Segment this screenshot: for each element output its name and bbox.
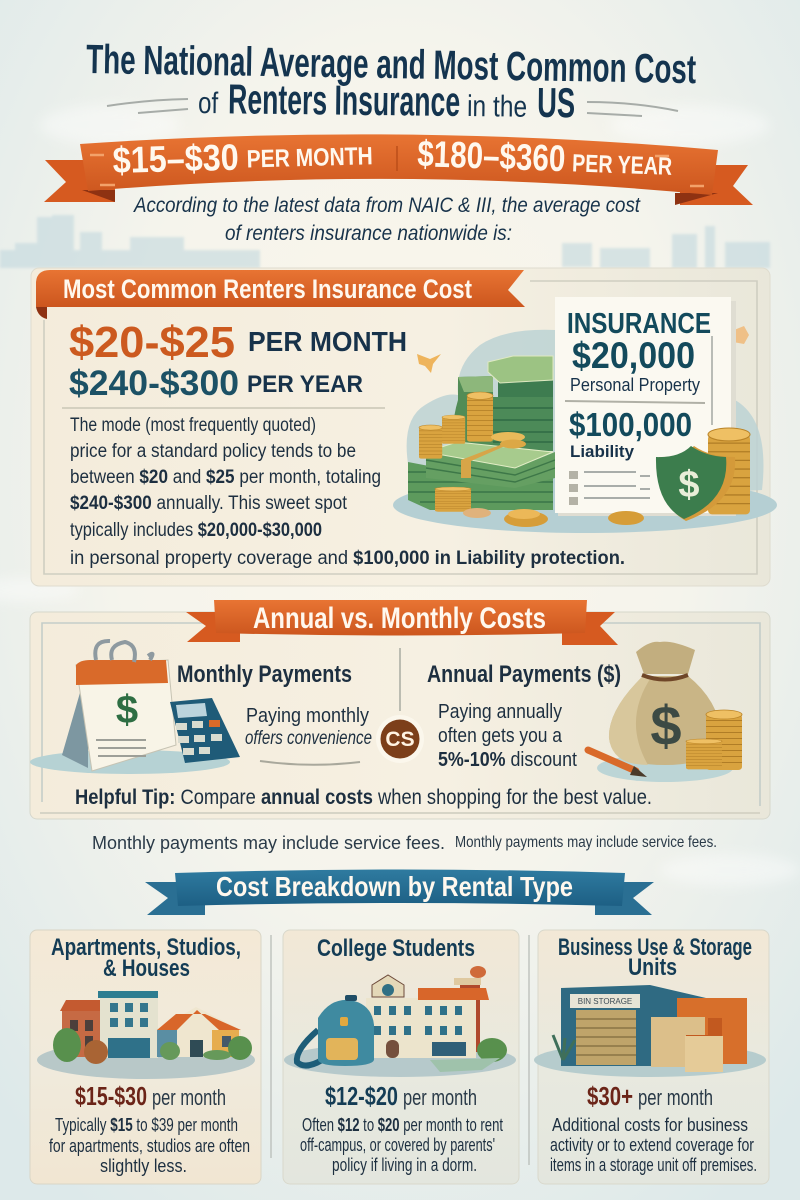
price per month: $15–$30 [112,137,239,181]
footnote: Monthly payments may include service fees. [455,834,717,851]
yearly price: $240-$300 [69,364,239,403]
intro text [132,194,641,245]
card price: $12-$20 [325,1081,398,1111]
body text: between $20 and $25 per month, totaling [70,467,381,488]
shield: $ [678,464,700,506]
yearly price [69,364,363,403]
title [86,36,697,126]
card price: per month [152,1085,226,1110]
card title: Apartments, Studios, [51,934,241,961]
card description: for apartments, studios are often [49,1136,250,1156]
price per year [417,133,673,183]
ribbon heading [186,600,618,645]
card: apartments, studios and houses [30,930,261,1184]
body text: typically includes $20,000-$30,000 [70,520,322,541]
icon: calendar and calculator: $ [116,688,138,732]
yearly price: PER YEAR [247,371,363,398]
title: US [537,79,575,126]
section heading: cost breakdown [145,870,654,915]
monthly price: $20-$25 [69,318,235,367]
price per year: $180–$360 [417,133,566,179]
card price [325,1081,477,1111]
body text: in personal property coverage and $100,000 in Liability protection. [70,548,625,569]
annual payments text [427,661,621,771]
illustration: storage unit [534,985,766,1077]
body text [70,415,625,569]
title: Renters Insurance [228,75,460,125]
policy document: INSURANCE [567,308,711,340]
body text: $240-$300 annually. This sweet spot [70,493,348,514]
card price: per month [638,1085,713,1110]
shield [656,446,735,521]
card price: per month [403,1085,477,1110]
illustration: backpack and campus [284,966,516,1077]
monthly payments text [177,661,372,765]
card title [558,934,752,981]
body text: The mode (most frequently quoted) [70,415,316,436]
footnote: Monthly payments may include service fees. [92,833,445,853]
card price: $15-$30 [75,1081,147,1111]
intro text: According to the latest data from NAIC & III, the average cost [132,194,641,217]
section heading: cost breakdown: Cost Breakdown by Rental Type [216,871,573,902]
ribbon heading: Annual vs. Monthly Costs [253,602,546,635]
icon: calendar and calculator [30,641,240,774]
cash stacks [408,356,555,527]
policy document: $100,000 [569,406,692,443]
card price: $30+ [587,1081,633,1111]
card description: off-campus, or covered by parents' [300,1135,495,1155]
card description: Additional costs for business [552,1115,748,1135]
monthly price: PER MONTH [248,326,407,357]
card description: slightly less. [100,1156,187,1176]
icon: CS badge: CS [385,728,415,751]
card price [587,1081,713,1111]
ribbon heading [36,270,525,319]
monthly payments text: Monthly Payments [177,661,352,688]
annual payments text: 5%-10% discount [438,749,577,771]
panel: most common cost [31,268,777,586]
card price [75,1081,226,1111]
annual payments text: Annual Payments ($) [427,661,621,688]
card description: Often $12 to $20 per month to rent [302,1115,503,1135]
footnote [92,833,717,853]
title: in the [467,90,527,124]
illustration: homes [37,991,255,1079]
monthly price [69,318,407,367]
icon: CS badge [376,715,424,763]
card: college students [283,930,519,1184]
price per month [112,133,373,181]
card title [51,934,241,982]
price per month: PER MONTH [246,142,373,173]
icon: money bag, coins and pen [588,642,742,782]
card: business use and storage [534,930,769,1184]
policy document: $20,000 [572,335,695,376]
card description [300,1115,503,1175]
monthly payments text: offers convenience [245,728,372,749]
card description: policy if living in a dorm. [332,1155,477,1175]
icon: money bag, coins and pen: $ [650,694,682,757]
helpful tip: Helpful Tip: Compare annual costs when shopping for the best value. [75,786,652,809]
coin stack [708,428,750,514]
panel: annual vs monthly [30,600,770,819]
policy document: Personal Property [570,375,700,395]
intro text: of renters insurance nationwide is: [225,222,512,245]
card description [550,1115,757,1175]
banner: national average cost [44,133,753,205]
policy document [555,297,736,516]
monthly payments text: Paying monthly [246,705,369,727]
body text: price for a standard policy tends to be [70,441,356,462]
annual payments text: Paying annually [438,701,562,723]
card title: & Houses [103,955,190,982]
ribbon heading: Most Common Renters Insurance Cost [63,274,472,304]
card description: Typically $15 to $39 per month [55,1115,238,1135]
annual payments text: often gets you a [438,725,563,747]
price per year: PER YEAR [572,149,673,181]
policy document: Liability [570,442,635,461]
card title: Units [628,954,677,981]
card title: College Students [317,935,475,962]
title: of [198,87,219,120]
card description [49,1115,250,1176]
illustration: storage unit: BIN STORAGE [578,997,632,1006]
illustration: money, policy and shield [393,297,777,533]
